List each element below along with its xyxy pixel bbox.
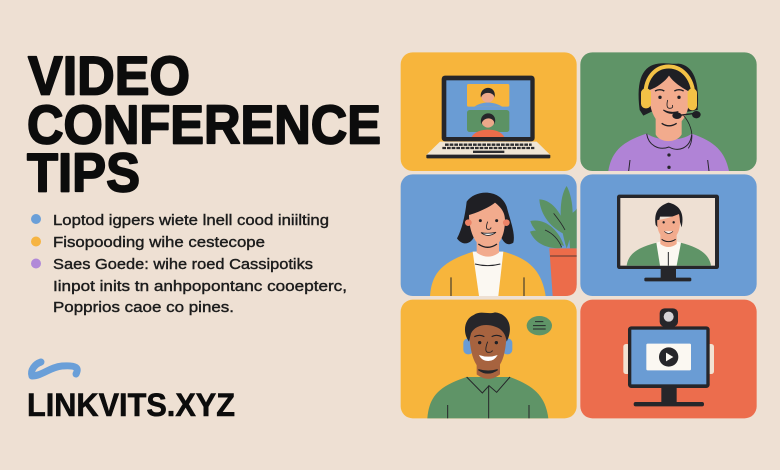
microphone	[677, 113, 695, 116]
shirt	[427, 377, 548, 418]
bullet text 1: Loptod igpers wiete lnell cood iniilting	[53, 212, 329, 229]
panel: woman with plant	[401, 174, 577, 296]
icon: monitor with webcam	[623, 308, 714, 406]
icon: monitor	[617, 195, 719, 281]
bullet dot: purple	[31, 258, 41, 268]
bullet text 3: Saes Goede: wihe roed Cassipotiks	[53, 256, 313, 273]
chat bubble	[527, 316, 552, 335]
neck and face	[477, 360, 500, 379]
bullet text 4: Iinpot inits tn anhpopontanc cooepterc,	[53, 278, 347, 295]
panel: smiling man with chat bubble	[401, 300, 577, 418]
face	[649, 76, 689, 128]
shirt	[608, 134, 729, 171]
neck	[656, 117, 682, 141]
bullet dot: blue	[31, 214, 41, 224]
panel: monitor with presenter	[580, 174, 757, 296]
headphones	[463, 338, 473, 354]
panel: person with headset	[580, 52, 757, 171]
face	[469, 203, 505, 249]
hair	[465, 312, 510, 342]
panel: webcam and play screen	[580, 300, 757, 418]
title: TIPS	[27, 142, 140, 204]
panel: laptop call	[401, 52, 577, 171]
logo swoosh	[32, 362, 77, 376]
plant	[530, 186, 577, 296]
title: CONFERENCE	[27, 94, 381, 156]
hair	[457, 193, 514, 244]
headset	[645, 66, 693, 102]
bullet list	[31, 212, 347, 316]
logo wordmark: LINKVITS.XYZ	[27, 387, 235, 423]
hair	[639, 63, 698, 116]
bullet text 2: Fisopooding wihe cestecope	[53, 234, 265, 251]
neck	[477, 237, 499, 257]
bullet dot: amber	[31, 236, 41, 246]
bullet text 5: Popprios caoe co pines.	[53, 299, 234, 316]
icon: laptop	[426, 76, 550, 158]
title	[27, 44, 381, 204]
jacket	[430, 252, 546, 296]
title: VIDEO	[28, 44, 190, 106]
